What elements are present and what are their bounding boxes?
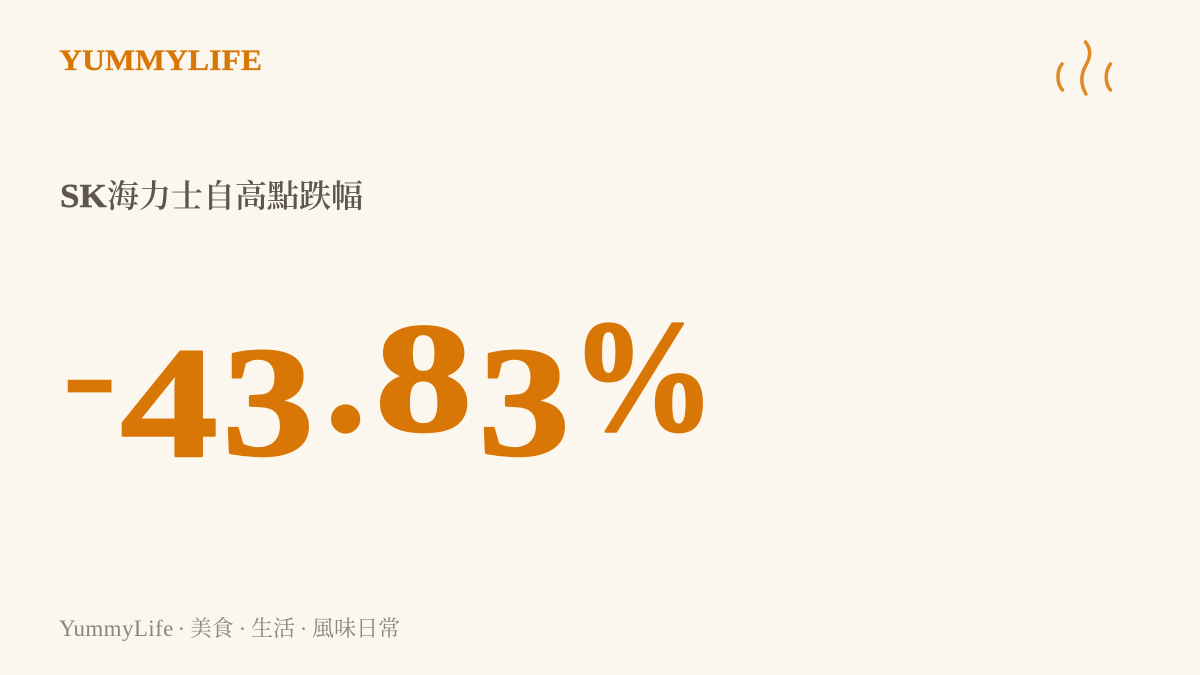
big number: .	[325, 283, 366, 466]
brand name: YUMMYLIFE	[59, 44, 262, 77]
icon: steam	[1056, 40, 1112, 96]
big number: -	[62, 290, 118, 454]
footer tagline: YummyLife · 美食 · 生活 · 風味日常	[59, 616, 400, 641]
big number: 8	[375, 292, 472, 465]
heading: 海力士自高點跌幅	[107, 178, 363, 214]
heading: SK	[60, 178, 107, 215]
big number: 3	[478, 315, 570, 489]
big number: 4	[120, 316, 218, 491]
big number: 3	[222, 315, 314, 489]
big number: %	[571, 287, 715, 465]
